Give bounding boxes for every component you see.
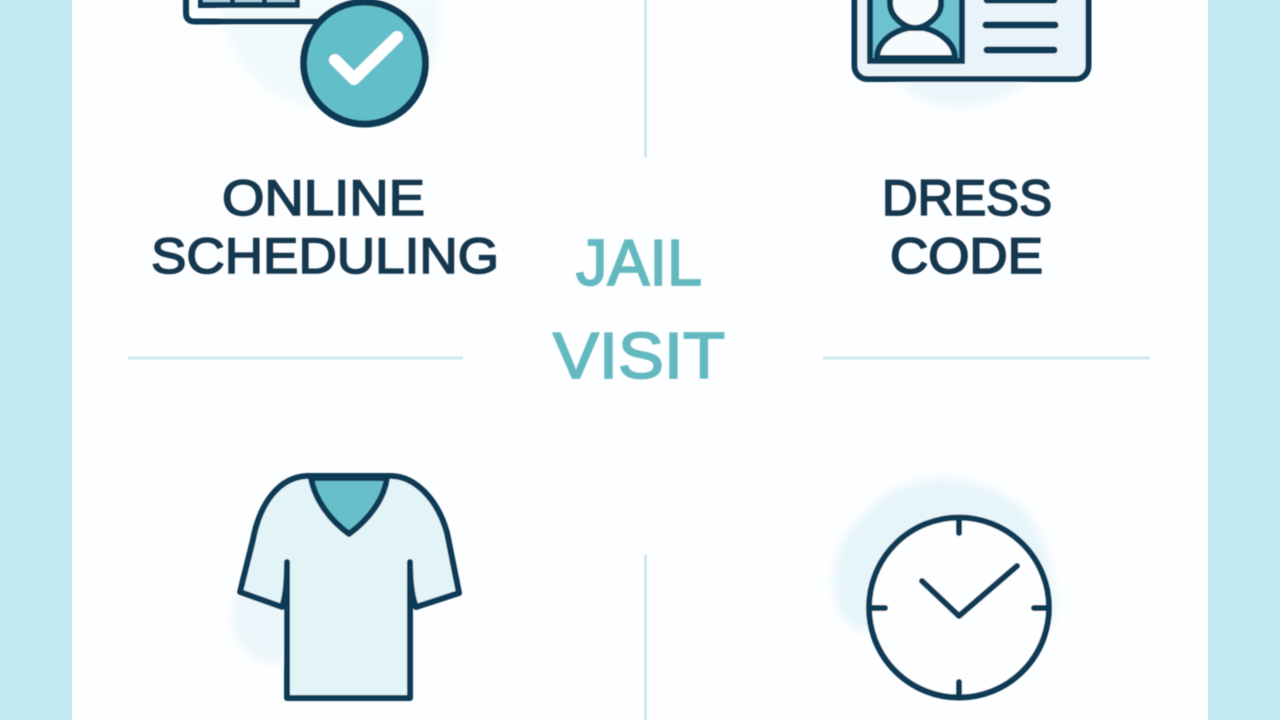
clock ticks <box>870 518 1049 697</box>
heading: dress code: DRESS <box>882 170 1052 226</box>
check badge <box>304 2 426 124</box>
left side band <box>0 0 72 720</box>
icon: online scheduling calendar with check <box>186 0 440 124</box>
clock hands <box>922 566 1017 616</box>
heading: online scheduling: ONLINE <box>222 170 425 226</box>
calendar card <box>186 0 330 22</box>
title: jail visit: JAIL <box>576 226 702 299</box>
shirt collar <box>311 478 387 534</box>
heading: dress code <box>882 170 1052 284</box>
heading: online scheduling <box>151 170 499 284</box>
ID text lines <box>986 0 1055 50</box>
icon background blob <box>834 478 1054 630</box>
card body <box>854 0 1088 79</box>
icon: clock <box>834 478 1054 698</box>
icon: t-shirt <box>233 476 459 698</box>
title: jail visit: VISIT <box>553 319 725 392</box>
icon background blob <box>895 78 1030 106</box>
heading: online scheduling: SCHEDULING <box>151 228 499 284</box>
shirt body <box>240 476 459 698</box>
ID photo <box>870 0 962 61</box>
clock face <box>869 518 1049 698</box>
heading: dress code: CODE <box>890 228 1043 284</box>
icon background blob <box>222 0 440 112</box>
icon background blob <box>233 590 285 662</box>
title: jail visit <box>553 226 725 392</box>
right side band <box>1208 0 1280 720</box>
icon: ID card <box>854 0 1088 106</box>
